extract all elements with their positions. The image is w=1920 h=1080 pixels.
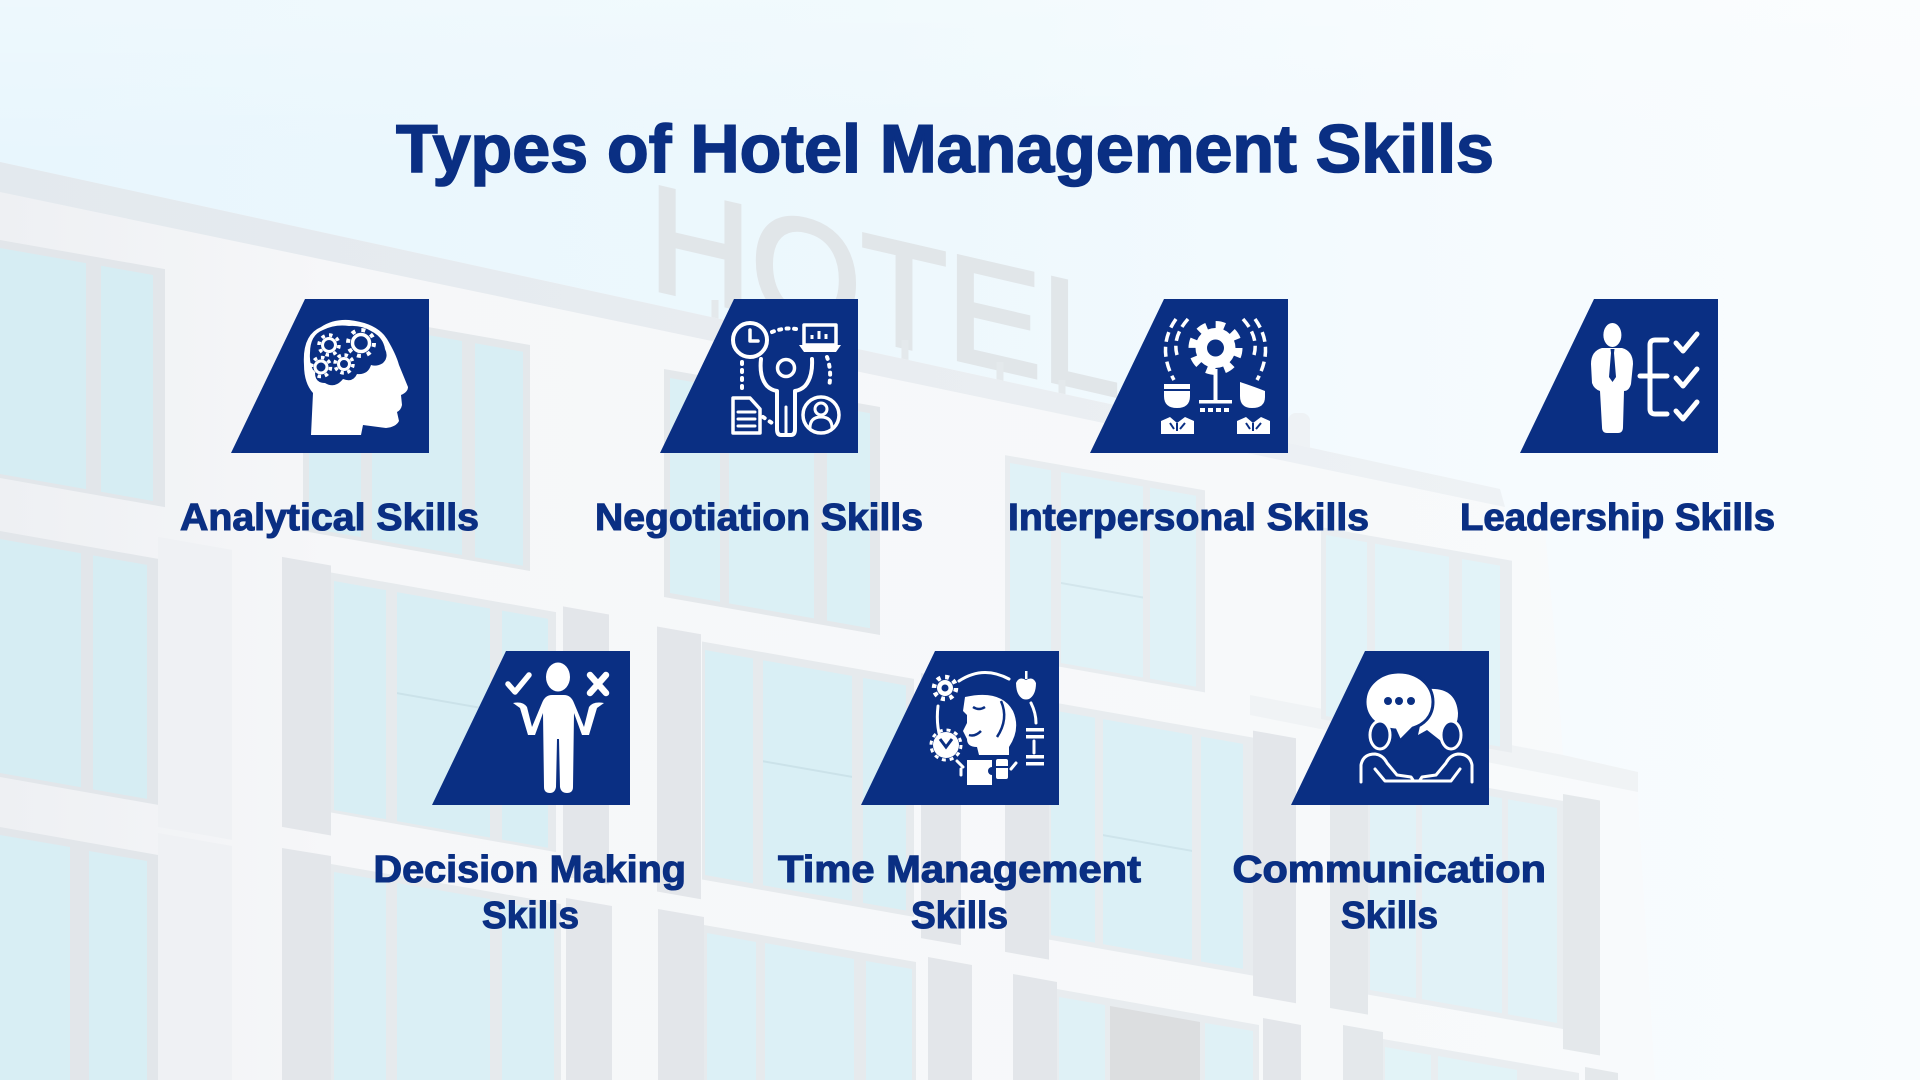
label: leadership skills: Leadership Skills <box>1460 497 1775 539</box>
icon: head surrounded by clock, gear, apple, dumbbell <box>861 651 1059 805</box>
icon: two people with speech bubbles <box>1291 651 1489 805</box>
label: time management skills: Skills <box>911 895 1008 937</box>
label: decision making skills: Skills <box>482 895 579 937</box>
windows row 1 <box>0 240 1512 753</box>
card: negotiation skills <box>595 299 923 539</box>
card: leadership skills <box>1460 299 1775 539</box>
icon: head with gears <box>231 299 429 453</box>
icon: person weighing check and cross <box>432 651 630 805</box>
label: communication skills <box>1232 849 1546 937</box>
card: interpersonal skills <box>1008 299 1369 539</box>
label: negotiation skills: Negotiation Skills <box>595 497 923 539</box>
card: decision making skills <box>374 651 686 937</box>
label: time management skills <box>778 849 1141 937</box>
card: communication skills <box>1232 651 1546 937</box>
icon: person with clock, laptop, document, profile <box>660 299 858 453</box>
icon: two people sharing a gear <box>1090 299 1288 453</box>
icon: leader with checklist <box>1520 299 1718 453</box>
windows row 2 <box>0 509 1600 1056</box>
label: decision making skills: Decision Making <box>374 849 686 891</box>
card: time management skills <box>778 651 1141 937</box>
label: decision making skills <box>374 849 686 937</box>
label: analytical skills: Analytical Skills <box>180 497 479 539</box>
title: Types of Hotel Management Skills <box>396 111 1494 187</box>
hotel roof sign: HOTEL <box>649 153 1120 429</box>
label: interpersonal skills: Interpersonal Skills <box>1008 497 1369 539</box>
label: communication skills: Communication <box>1232 849 1546 891</box>
card: analytical skills <box>180 299 479 539</box>
windows row 3 <box>0 827 1618 1080</box>
label: time management skills: Time Management <box>778 849 1141 891</box>
label: communication skills: Skills <box>1341 895 1438 937</box>
